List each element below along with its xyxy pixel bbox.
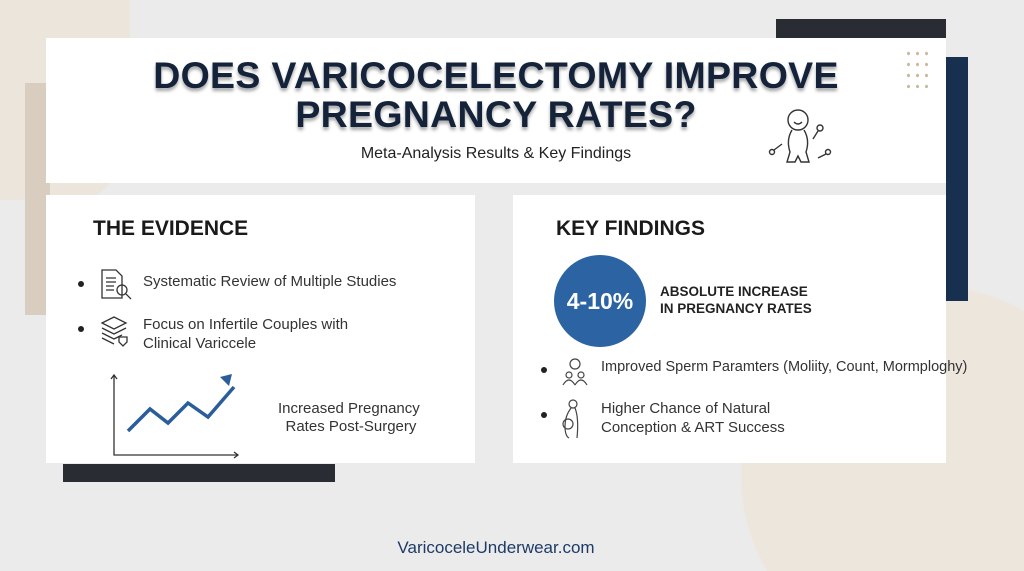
bullet: sperm parameters: Improved Sperm Paramters (Moliity, Count, Mormploghy) [601,359,967,375]
dark bar top right [776,19,946,39]
dots decoration [904,48,934,88]
navy vertical bar [946,57,968,301]
chart caption: Rates Post-Surgery [286,418,416,435]
bullet: natural conception: Higher Chance of Natural [601,400,770,417]
header panel [46,38,946,183]
stat label: ABSOLUTE INCREASE [660,284,808,299]
stat label [660,284,812,316]
chart caption [278,400,420,435]
title: PREGNANCY RATES? [295,93,697,135]
footer url: VaricoceleUnderwear.com [397,538,595,557]
panel: key findings [513,195,946,463]
chart caption: Increased Pregnancy [278,400,420,417]
subtitle: Meta-Analysis Results & Key Findings [361,145,631,162]
bullet 2 [78,316,348,352]
bullet: sperm parameters [541,358,967,386]
heading: KEY FINDINGS [556,217,705,240]
bullet: natural conception [541,399,785,438]
bullet: natural conception: Conception & ART Success [601,419,785,436]
heading: THE EVIDENCE [93,217,248,240]
bullet 2: Clinical Variccele [143,335,256,352]
icon: baby with sperm [768,109,832,163]
stat label: IN PREGNANCY RATES [660,301,812,316]
stat circle: 4-10% [567,288,633,314]
dark bar bottom left [63,464,335,482]
title [153,54,839,135]
chart: rising line [110,374,239,458]
panel: the evidence [46,195,475,463]
title: DOES VARICOCELECTOMY IMPROVE [153,54,839,96]
bullet 1 [78,269,396,300]
stat circle [554,255,646,347]
bullet 2: Focus on Infertile Couples with [143,316,348,333]
bullet 1: Systematic Review of Multiple Studies [143,273,396,290]
